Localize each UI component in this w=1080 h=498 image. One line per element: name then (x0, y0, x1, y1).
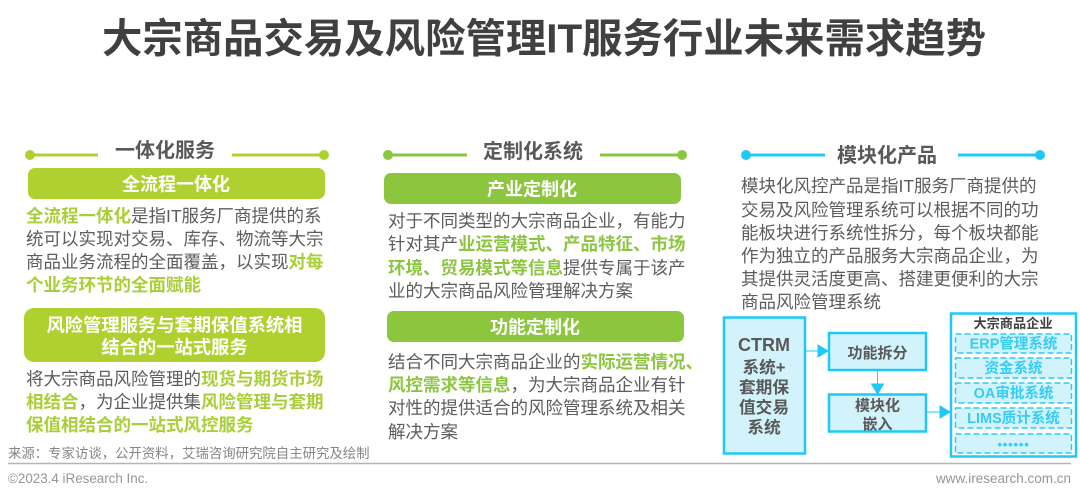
box: CTRM system: 套期保 (739, 377, 789, 397)
box: CTRM system: 系统+ (742, 357, 786, 377)
title: 大宗商品交易及风险管理IT服务行业未来需求趋势 (102, 16, 986, 62)
box: modular embed (829, 394, 926, 433)
label bar: one-stop service: 风险管理服务与套期保值系统相 (47, 314, 302, 336)
heading: integrated services (25, 139, 329, 162)
arrow: CTRM to function split (805, 345, 828, 357)
module: LIMS: LIMS质计系统 (967, 409, 1060, 427)
label bar: industry customization: 产业定制化 (487, 178, 577, 200)
text block: industry customization description (388, 211, 686, 301)
box: commodity enterprise: 大宗商品企业 (973, 315, 1053, 331)
text block: modular description: 其提供灵活度更高、搭建更便利的大宗 (741, 269, 1038, 289)
text block: one-stop description: 相结合，为企业提供集风险管理与套期 (26, 392, 324, 412)
label bar: industry customization (384, 173, 681, 204)
source note: 来源：专家访谈，公开资料，艾瑞咨询研究院自主研究及绘制 (8, 445, 370, 461)
text block: modular description: 商品风险管理系统 (741, 292, 881, 312)
module: LIMS (956, 408, 1072, 428)
box: modular embed: 嵌入 (862, 416, 893, 433)
module: treasury: 资金系统 (984, 359, 1043, 377)
text block: function customization description: 解决方案 (388, 422, 458, 442)
text block: industry customization description: 对于不同类型的大宗商品企业，有能力 (388, 211, 686, 231)
box: CTRM system: CTRM (738, 335, 790, 355)
module: ERP (956, 334, 1072, 353)
flow diagram (724, 314, 1076, 456)
panel: customized systems (383, 139, 703, 442)
heading: modular products: 模块化产品 (837, 144, 937, 167)
box: CTRM system: 系统 (747, 417, 781, 437)
text block: one-stop description: 将大宗商品风险管理的现货与期货市场 (26, 369, 324, 389)
copyright: ©2023.4 iResearch Inc. (8, 471, 148, 486)
module: treasury (956, 358, 1072, 378)
text block: one-stop description (26, 369, 324, 435)
text block: function customization description: 对性的提供适合的风险管理系统及相关 (388, 398, 686, 418)
box: commodity enterprise (951, 314, 1076, 456)
panel: integrated services (24, 139, 329, 435)
module: ERP: ERP管理系统 (970, 334, 1058, 352)
text block: full-process description: 统可以实现对交易、库存、物流等大宗 (26, 229, 324, 249)
heading: modular products (741, 144, 1045, 167)
box: function split: 功能拆分 (847, 344, 908, 362)
label bar: one-stop service (24, 308, 325, 362)
module: OA approval: OA审批系统 (974, 384, 1054, 402)
text block: one-stop description: 保值相结合的一站式风控服务 (26, 415, 254, 435)
box: modular embed: 模块化 (855, 396, 900, 414)
text block: function customization description: 风控需求等信息，为大宗商品企业有针 (388, 375, 686, 395)
box: CTRM system: 值交易 (739, 397, 789, 417)
text block: full-process description: 商品业务流程的全面覆盖，以实现对每 (26, 252, 324, 272)
website: www.iresearch.com.cn (935, 471, 1071, 486)
arrow: modular embed to enterprise (927, 406, 950, 418)
text block: modular description: 能板块进行系统性拆分，每个板块都能 (741, 223, 1038, 243)
text block: industry customization description: 业的大宗商品风险管理解决方案 (388, 281, 633, 301)
text block: modular description: 交易及风险管理系统可以根据不同的功 (741, 200, 1038, 220)
label bar: full-process integration: 全流程一体化 (122, 174, 230, 194)
box: CTRM system (724, 318, 805, 454)
panel: modular products (724, 144, 1076, 456)
label bar: function customization: 功能定制化 (490, 316, 580, 338)
text block: full-process description: 个业务环节的全面赋能 (26, 275, 201, 295)
heading: customized systems: 定制化系统 (483, 139, 583, 163)
text block: industry customization description: 环境、贸易模式等信息提供专属于该产 (388, 258, 686, 278)
heading: customized systems (383, 139, 687, 163)
text block: function customization description: 结合不同大宗商品企业的实际运营情况、 (388, 352, 703, 372)
heading: integrated services: 一体化服务 (115, 139, 215, 162)
label bar: full-process integration (28, 168, 325, 199)
text block: function customization description (388, 352, 703, 442)
text block: modular description: 模块化风控产品是指IT服务厂商提供的 (741, 176, 1037, 196)
text block: full-process description: 全流程一体化是指IT服务厂商提供的系 (26, 206, 322, 226)
text block: full-process description (26, 206, 324, 295)
text block: modular description (741, 176, 1038, 312)
module: more (956, 434, 1072, 453)
text block: modular description: 作为独立的产品服务大宗商品企业，为 (741, 246, 1038, 266)
module: OA approval (956, 383, 1072, 403)
arrow: function split to modular embed (872, 370, 884, 394)
label bar: function customization (387, 311, 684, 342)
label bar: one-stop service: 结合的一站式服务 (101, 336, 248, 358)
box: function split (829, 333, 926, 370)
text block: industry customization description: 针对其产业运营模式、产品特征、市场 (388, 234, 686, 254)
module: more: •••••• (997, 437, 1030, 452)
